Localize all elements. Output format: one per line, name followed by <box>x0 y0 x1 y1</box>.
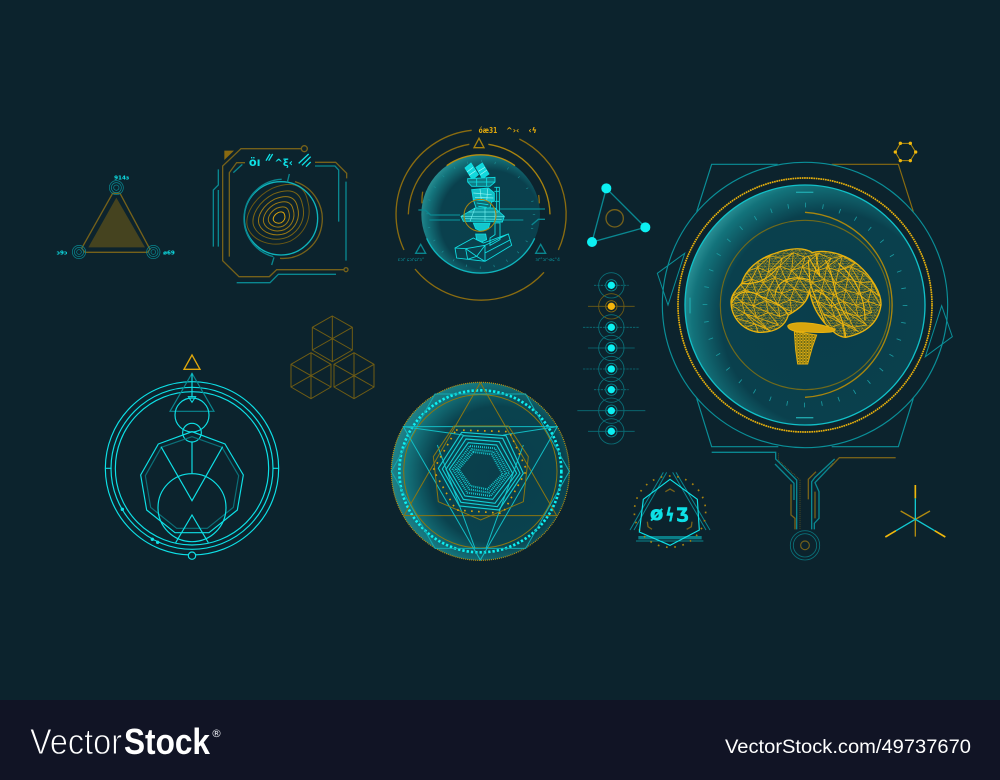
icon: node triangle <box>587 183 650 247</box>
gold triangle <box>404 383 557 516</box>
ring ticks and beads <box>105 468 279 559</box>
triangle outline <box>82 193 150 252</box>
badge glyphs <box>650 504 689 526</box>
panel: contour map frame <box>213 146 348 283</box>
gold focus ring <box>464 199 496 231</box>
cyan triangle <box>403 427 557 560</box>
focus knob <box>476 234 487 242</box>
corner marker <box>224 151 234 160</box>
teal hexagon <box>391 394 569 548</box>
brain gyri folds <box>732 253 865 337</box>
badge glyphs: ø <box>650 504 664 525</box>
nonagon body <box>141 432 243 533</box>
port circles <box>790 531 820 560</box>
gold triangle <box>184 355 200 369</box>
gold dotted ring <box>678 178 932 432</box>
V triangle <box>161 447 223 501</box>
disk ticks <box>427 161 534 268</box>
glass disk <box>685 185 925 425</box>
gold corners <box>647 489 692 529</box>
gold heptagon <box>433 426 528 520</box>
cube right <box>334 353 374 399</box>
panel: isometric cubes <box>291 316 374 399</box>
footer bar <box>0 700 1000 780</box>
teal traces <box>712 452 835 529</box>
registered mark: ® <box>211 727 222 740</box>
inner ring <box>720 220 890 390</box>
microscope <box>455 163 512 261</box>
nosepiece <box>473 223 490 231</box>
node 7 <box>577 398 645 423</box>
outer ring <box>662 162 948 448</box>
nested polygons <box>438 432 523 510</box>
inner gold ring <box>404 395 557 548</box>
body <box>472 188 494 204</box>
header glyphs middle: ^ξ‹ <box>274 158 293 169</box>
top label: ^›‹ <box>506 125 519 135</box>
hatch marks <box>266 154 311 167</box>
footer image id: VectorStock.com/49737670 <box>725 736 971 758</box>
panel: microscope dial <box>396 125 566 300</box>
footer logo word: Vector: Vector <box>30 721 122 762</box>
gold traces <box>791 458 896 529</box>
cube left <box>291 353 331 399</box>
contour rings <box>247 184 309 244</box>
badge glyphs: ϟ <box>666 505 674 526</box>
gold arc <box>805 212 892 397</box>
cerebellum disc <box>788 323 835 333</box>
housing trapezoids <box>697 164 913 447</box>
node 4 <box>588 335 635 361</box>
node 8 <box>588 419 635 444</box>
brain outline <box>731 249 881 337</box>
panel: circuit connector <box>712 452 896 560</box>
disk lower rim <box>427 238 535 273</box>
panel: glyph hex badge <box>630 472 710 547</box>
triangle markers <box>416 138 546 253</box>
node: left <box>72 245 86 259</box>
panel: hexagram disk <box>391 382 569 560</box>
stage <box>461 208 504 222</box>
lower triangle <box>176 515 208 543</box>
left label: ɛɔґ ɕɔґɕґɜ° <box>398 257 424 263</box>
node 6 <box>594 377 629 402</box>
cyan hexagon <box>639 479 699 545</box>
long marks <box>690 192 813 418</box>
label: right: ø69 <box>163 251 175 257</box>
hexagon node <box>894 142 917 162</box>
frame lines gold <box>223 149 347 277</box>
base <box>455 234 512 261</box>
head circles <box>175 373 209 473</box>
eyepieces <box>465 163 478 180</box>
node 1 <box>594 273 629 298</box>
teal rays <box>630 472 710 541</box>
frame lines teal <box>213 164 346 283</box>
icon: asterisk star <box>885 485 945 537</box>
top label: ‹ϟ <box>528 125 537 135</box>
node: right <box>147 245 160 259</box>
node 5 <box>583 356 640 382</box>
dotted trace <box>778 453 800 529</box>
dial ticks <box>705 205 905 405</box>
panel: node chain <box>577 273 645 444</box>
right label: ɜґ°ɔґ-øɕ°4 <box>535 257 560 263</box>
panel: triangle emblem <box>57 175 175 259</box>
brain wireframe <box>730 248 882 364</box>
header glyphs: öı <box>249 155 261 169</box>
small inverted triangle <box>188 397 196 402</box>
concentric rings <box>105 382 279 555</box>
teal triangle <box>170 373 214 411</box>
ring dial <box>244 174 322 265</box>
footer logo word: Stock: Stock <box>124 721 211 762</box>
dotted cyan ring <box>399 390 561 552</box>
gold dial arcs <box>396 130 566 300</box>
gold dotted polygon <box>433 430 527 513</box>
side triangles <box>657 253 952 357</box>
panel: brain scanner <box>657 142 952 448</box>
neck <box>473 200 492 210</box>
badge glyphs: Ʒ <box>676 505 689 526</box>
frame end circles <box>301 146 348 272</box>
label: top: 914з <box>114 175 129 181</box>
top label <box>479 125 537 135</box>
body circle <box>158 474 226 542</box>
node 2 gold <box>588 294 635 319</box>
label: left: ɔ9ɔ <box>57 251 67 257</box>
disk with gold dotted rim <box>391 382 569 560</box>
glass disk <box>421 155 540 274</box>
brain stem <box>794 332 817 364</box>
panel: circular figure emblem <box>105 355 279 559</box>
node 3 <box>583 315 640 340</box>
node: top <box>109 181 123 195</box>
cube top <box>312 316 352 362</box>
teal bar <box>638 536 702 539</box>
top label: óæ31 <box>479 125 497 135</box>
filled olive triangle <box>88 198 145 247</box>
head <box>468 177 495 186</box>
arm <box>494 187 499 215</box>
gold dot ring <box>634 476 706 547</box>
pillar <box>490 223 500 245</box>
circuit lines <box>418 209 545 225</box>
